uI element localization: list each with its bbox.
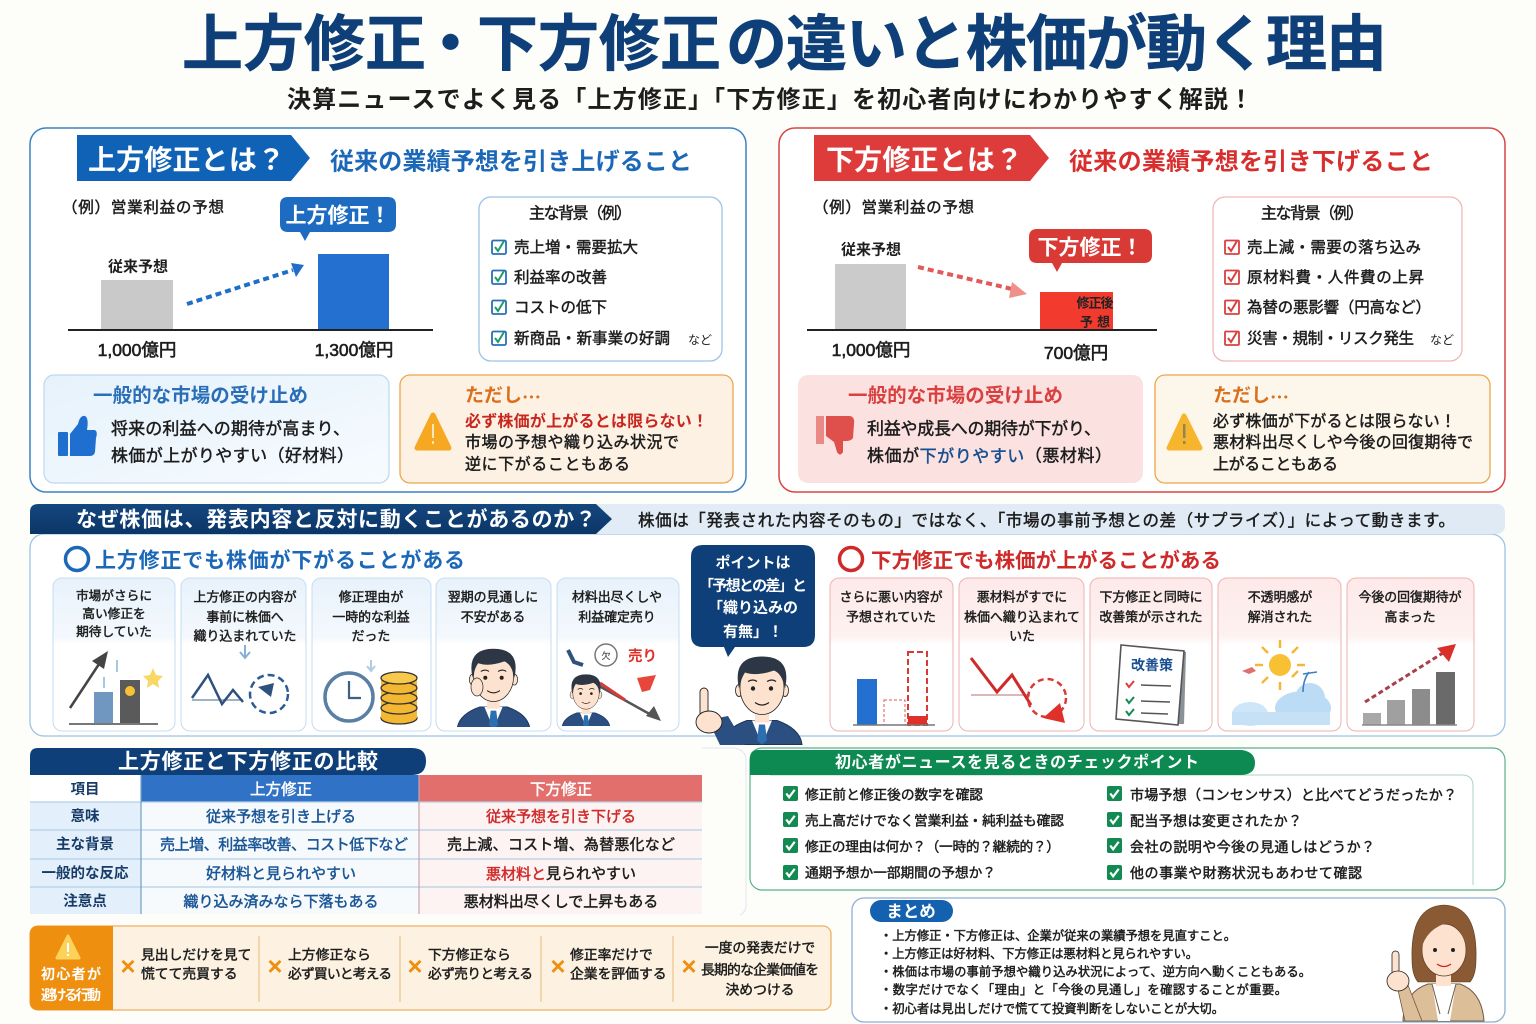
item: always sell: 下方修正なら [428,948,511,962]
point speech bubble: 有無」！ [723,624,783,640]
card: higher expectations: 高い修正を [82,606,146,621]
background list: 利益率の改善 [514,268,607,286]
market reaction box: 一般的な市場の受け止め [93,384,308,407]
summary text: ・初心者は見出しだけで慌てて投資判断をしないことが大切。 [880,1001,1224,1016]
background list: 為替の悪影響（円高など） [1247,298,1431,316]
strip label: 初心者が [41,966,101,982]
icon: plan document: 改善策 [1131,657,1173,673]
market reaction box [798,375,1143,483]
point speech bubble: ポイントは [715,554,791,572]
bar chart: operating profit forecast: 予想 [1080,314,1110,330]
card: priced in: 上方修正の内容が [193,590,297,604]
background list: 主な背景（例） [1261,204,1364,222]
checklist: right: 配当予想は変更されたか？ [1130,813,1302,829]
card: uncertainty resolved: 解消された [1248,610,1312,624]
subtitle: 決算ニュースでよく見る「上方修正」「下方修正」を初心者向けにわかりやすく解説！ [287,86,1253,114]
market reaction box: 株価が上がりやすい（好材料） [111,446,354,466]
icon: man selling: 欠 [601,650,611,661]
card: higher expectations: 期待していた [76,625,152,639]
strip label [30,926,113,1010]
card: already priced in [959,578,1084,731]
table [30,775,702,914]
icon: thumbs down [816,416,854,454]
card: next-term outlook: 翌期の見通しに [448,590,538,604]
item: single announcement: 長期的な企業価値を [701,962,819,978]
card: worse content expected: さらに悪い内容が [839,590,943,604]
icon: worried man [457,649,530,729]
market reaction box [44,375,389,483]
item: single announcement: 決めつける [726,982,794,998]
strip: actions beginners should avoid [30,926,831,1010]
item: revision rate only: 企業を評価する [570,966,667,982]
background list [1213,197,1462,361]
item: panic trading: 慌てて売買する [141,966,238,982]
panel: downward revision [779,128,1505,492]
icon: sun and clouds [1232,640,1331,726]
icon: pointing man [696,656,802,745]
background list: 原材料費・人件費の上昇 [1247,268,1424,286]
card: temporary profit: 一時的な利益 [332,610,410,624]
card: already priced in: 悪材料がすでに [977,590,1067,604]
background list: 主な背景（例） [529,204,632,222]
item: always sell [407,948,533,982]
caution box: 必ず株価が下がるとは限らない！ [1213,412,1456,430]
icon: rising bars [1362,644,1457,725]
checklist: right: 他の事業や財務状況もあわせて確認 [1130,865,1362,881]
checkpoints heading [750,750,1255,775]
caution box: ただし… [1213,382,1289,410]
icon: man selling: 売り [628,648,657,665]
checklist: left: 修正前と修正後の数字を確認 [805,786,983,802]
band: explanation [30,504,1505,534]
panel: summary [852,898,1505,1022]
title: の違いと株価が動く理由 [726,10,1386,78]
item: single announcement: × [681,951,697,981]
item: always sell: × [407,951,423,981]
table: 項目 [70,781,100,798]
table: 悪材料と見られやすい [486,866,636,882]
bar chart: operating profit forecast: 上方修正！ [286,204,390,228]
card: profit taking: 利益確定売り [578,610,656,624]
icon: zigzag and dashed circle [192,645,288,713]
card: already priced in: いた [1009,628,1035,644]
section: comparison table [30,748,746,915]
checklist: left [783,786,1064,880]
card: uncertainty resolved [1218,578,1341,731]
card: priced in: 織り込まれていた [194,628,296,644]
card: temporary profit [312,578,431,731]
card: higher expectations [53,578,175,731]
background list: など [688,333,712,347]
table: 織り込み済みなら下落もある [183,894,379,910]
table: 好材料と見られやすい [206,866,356,882]
table: 上方修正 [250,780,312,798]
bar chart: operating profit forecast: 修正後 [1076,296,1114,310]
checklist: left: 売上高だけでなく営業利益・純利益も確認 [805,812,1064,828]
item: revision rate only: 修正率だけで [570,948,653,962]
bar chart: operating profit forecast: 1,300億円 [315,340,393,360]
card: next-term outlook [436,578,551,731]
checklist: right: 市場予想（コンセンサス）と比べてどうだったか？ [1130,787,1457,803]
card: priced in: 事前に株価へ [206,610,284,624]
band text: 株価は「発表された内容そのもの」ではなく、「市場の事前予想との差（サプライズ）」によって動きます。 [638,511,1455,530]
item: always buy: 上方修正なら [288,948,371,962]
panel: checkpoints [750,748,1505,890]
market reaction box: 将来の利益への期待が高まり、 [111,420,350,438]
panel: upward revision [30,128,746,492]
subheading: down but rises: 下方修正でも株価が上がることがある [871,548,1221,572]
icon: man selling [562,644,661,727]
strip label: 避ける行動 [41,987,101,1003]
item: revision rate only: × [550,951,566,981]
point speech bubble: 「織り込みの [708,600,798,616]
item: panic trading: × [120,951,136,981]
card: improvement plan: 下方修正と同時に [1099,590,1203,604]
bar chart: operating profit forecast: 1,000億円 [98,340,176,360]
checklist: left: 修正の理由は何か？（一時的？継続的？） [805,838,1060,854]
checklist: right: 会社の説明や今後の見通しはどうか？ [1130,839,1375,855]
card: recovery expectation: 高まった [1384,610,1436,624]
point speech bubble: 「予想との差」と [699,576,807,594]
icon: woman pointing [1387,905,1484,1021]
card: improvement plan: 改善策が示された [1099,610,1203,624]
title: 下方修正 [477,10,721,78]
subheading: up but falls: 上方修正でも株価が下がることがある [95,548,465,572]
table heading: 上方修正と下方修正の比較 [118,750,378,774]
table: 従来予想を引き下げる [486,808,636,826]
card: uncertainty resolved: 不透明感が [1248,590,1312,604]
background list: 売上減・需要の落ち込み [1247,238,1421,256]
caution box [1155,375,1490,483]
table: 意味 [70,808,100,825]
band heading [30,504,612,534]
bar chart: operating profit forecast: 従来予想 [841,242,901,258]
item: always buy: 必ず買いと考える [288,966,392,982]
icon: bars and arrow [69,651,163,724]
caution box: ただし… [465,382,541,410]
item: always sell: 必ず売りと考える [428,966,533,982]
summary heading: まとめ [886,903,936,921]
market reaction box: 利益や成長への期待が下がり、 [867,420,1101,438]
summary text: ・株価は市場の事前予想や織り込み状況によって、逆方向へ動くこともある。 [880,964,1311,979]
summary text [880,928,1311,1016]
bar chart: operating profit forecast [62,197,433,360]
summary text: ・上方修正は好材料、下方修正は悪材料と見られやすい。 [880,946,1198,961]
heading: upward revision [77,135,310,181]
title: ・ [420,10,481,78]
caution box: 市場の予想や織り込み状況で [465,434,679,452]
heading: downward revision [814,135,1049,181]
bar chart: operating profit forecast: 700億円 [1044,343,1108,363]
caution box: 必ず株価が上がるとは限らない！ [465,412,708,430]
icon: falling line and dashed circle [971,658,1066,723]
card: temporary profit: 修正理由が [339,590,403,604]
caution box: 上がることもある [1213,456,1338,474]
card: recovery expectation [1347,578,1474,731]
card: worse content expected [830,578,953,731]
bar chart: operating profit forecast [807,198,1157,363]
card: profit taking: 材料出尽くしや [572,590,662,604]
table: 売上減、コスト増、為替悪化など [447,836,675,854]
definition text: 従来の業績予想を引き上げること [330,148,692,176]
summary text: ・数字だけでなく「理由」と「今後の見通し」を確認することが重要。 [880,982,1287,997]
caution box [400,375,733,483]
background list: 災害・規制・リスク発生 [1247,330,1414,348]
title: 上方修正 [182,10,426,78]
table: 下方修正 [530,780,592,798]
heading: downward revision: 下方修正とは？ [826,144,1023,176]
item: revision rate only [550,948,667,982]
item: single announcement: 一度の発表だけで [705,940,815,956]
item: single announcement [681,940,819,998]
point speech bubble [691,545,815,657]
summary text: ・上方修正・下方修正は、企業が従来の業績予想を見直すこと。 [880,928,1236,943]
item: always buy: × [267,951,283,981]
caution box: 悪材料出尽くしや今後の回復期待で [1213,434,1473,452]
caution box: 逆に下がることもある [465,456,630,474]
bar chart: operating profit forecast: （例）営業利益の予想 [813,198,974,216]
icon: thumbs up [58,416,97,456]
market reaction box: 一般的な市場の受け止め [848,384,1063,407]
card: already priced in: 株価へ織り込まれて [964,610,1080,624]
table: 売上増、利益率改善、コスト低下など [160,836,408,854]
bar chart: operating profit forecast: 下方修正！ [1038,236,1142,260]
card: improvement plan [1090,578,1212,731]
icon: warning [1169,416,1200,448]
background list: 売上増・需要拡大 [514,238,638,256]
icon: plan document [1116,645,1186,725]
card: profit taking [557,578,679,731]
table: 注意点 [63,892,107,910]
bar chart: operating profit forecast: 従来予想 [108,258,168,276]
card: temporary profit: だった [352,628,390,644]
background list: コストの低下 [514,298,607,316]
card: next-term outlook: 不安がある [461,610,525,624]
market reaction box: 株価が下がりやすい（悪材料） [867,446,1112,466]
heading: upward revision: 上方修正とは？ [88,144,285,176]
icon: warning [417,415,449,448]
band heading: なぜ株価は、発表内容と反対に動くことがあるのか？ [76,508,596,532]
background list: など [1430,333,1454,347]
checklist: right [1107,786,1457,881]
icon: clock and coins [325,660,417,724]
table heading [30,748,426,775]
table: 従来予想を引き上げる [206,808,356,826]
background list [479,197,722,361]
background list: 新商品・新事業の好調 [514,330,670,348]
checklist: left: 通期予想か一部期間の予想か？ [805,866,996,880]
item: panic trading: 見出しだけを見て [141,948,251,962]
card: recovery expectation: 今後の回復期待が [1358,590,1462,604]
table: 主な背景 [56,835,114,853]
card: higher expectations: 市場がさらに [76,589,152,603]
bar chart: operating profit forecast: 1,000億円 [832,340,910,360]
item: always buy [267,948,392,982]
section: why stock moves opposite [30,504,1505,745]
checkpoints heading: 初心者がニュースを見るときのチェックポイント [835,752,1199,772]
definition text: 従来の業績予想を引き下げること [1069,148,1433,176]
icon: bars with dashed outline [853,652,935,725]
card: priced in [181,578,306,731]
table: 悪材料出尽くしで上昇もある [464,894,658,910]
summary heading [870,900,953,922]
bar chart: operating profit forecast: （例）営業利益の予想 [62,198,224,216]
table: 一般的な反応 [42,864,129,882]
item: panic trading [120,948,251,982]
card: worse content expected: 予想されていた [846,610,936,624]
